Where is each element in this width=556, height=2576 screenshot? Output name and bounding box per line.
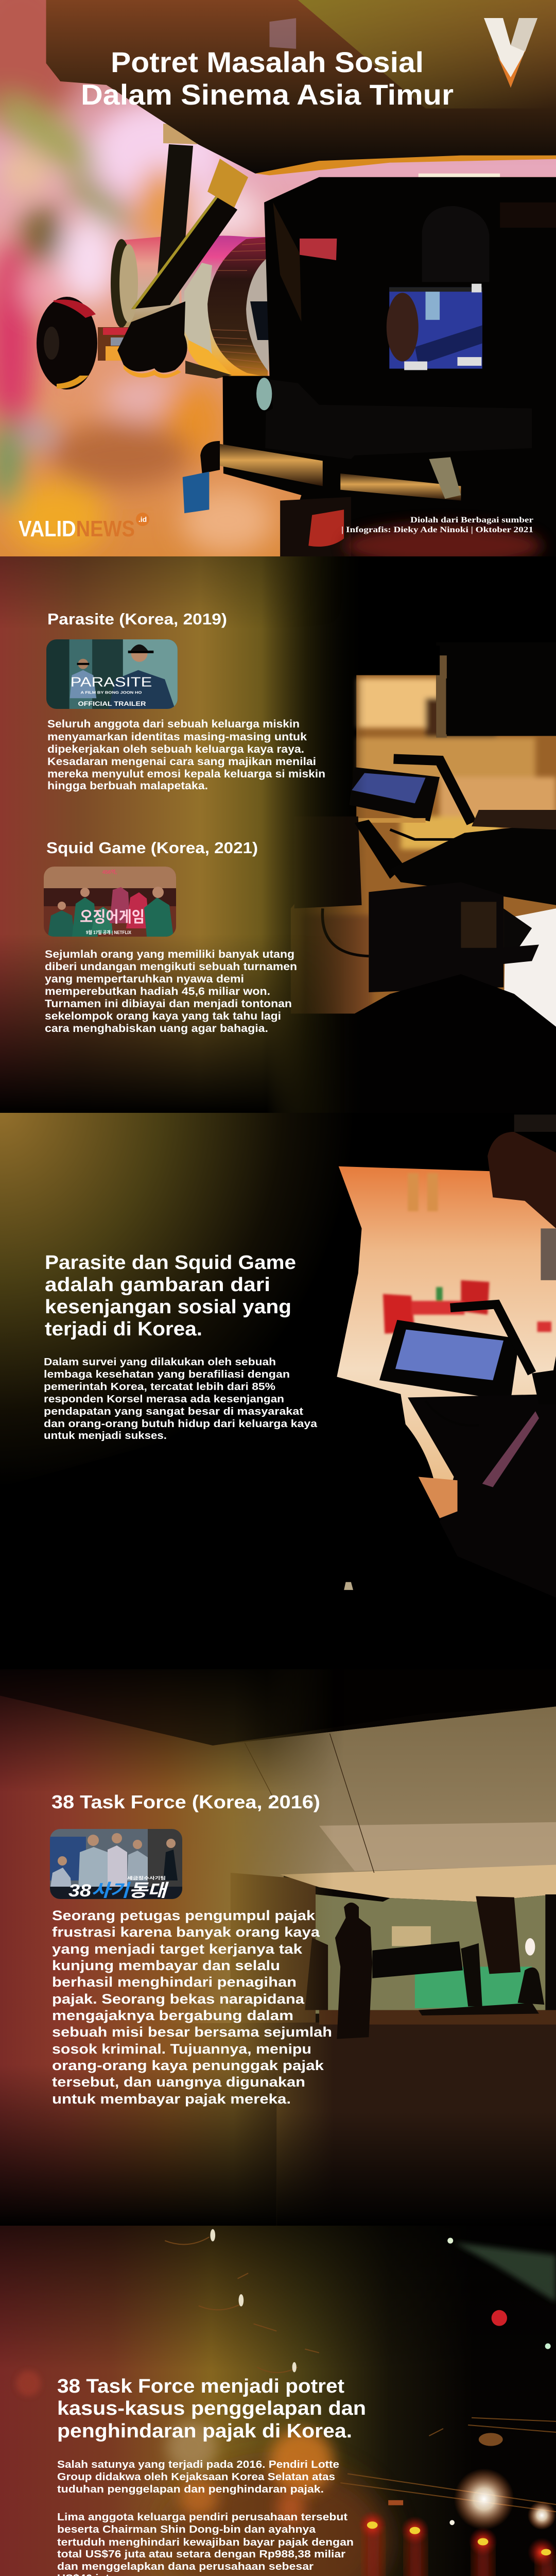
heading: social gap statement: kesenjangan sosial yang [45, 1296, 291, 1318]
thumbnail: Parasite poster: OFFICIAL TRAILER [78, 700, 146, 707]
text: survey paragraph: dan orang-orang butuh hidup dari keluarga kaya [44, 1418, 318, 1430]
panel: 38 Task Force [0, 1669, 556, 2226]
text: Squid Game synopsis: Turnamen ini dibiayai dan menjadi tontonan [45, 998, 292, 1010]
text: Lotte case figures: beserta Chairman Shin Dong-bin dan ayahnya [57, 2523, 316, 2535]
text: survey paragraph: lembaga kesehatan yang berafiliasi dengan [44, 1368, 290, 1380]
photo: film camera with lens and bokeh background [0, 0, 556, 556]
trusses [165, 2237, 556, 2512]
photo: camera rig on warm set [0, 556, 556, 1113]
rig [294, 817, 362, 908]
panel: hero cover [0, 0, 556, 556]
heading: social gap statement [45, 1252, 296, 1340]
text: survey paragraph [44, 1356, 318, 1442]
text: Squid Game synopsis: cara menghabiskan uang agar bahagia. [45, 1023, 268, 1035]
heading: tax evasion statement: penghindaran pajak di Korea. [57, 2420, 352, 2442]
text: Squid Game synopsis: yang mempertaruhkan nyawa demi [45, 973, 244, 985]
thumbnail: Parasite poster: A FILM BY BONG JOON HO [80, 691, 142, 694]
heading: Squid Game: Squid Game (Korea, 2021) [46, 839, 258, 857]
heading: tax evasion statement: kasus-kasus penggelapan dan [57, 2398, 366, 2419]
text: Squid Game synopsis: sekelompok orang kaya yang tak tahu lagi [45, 1010, 281, 1022]
heading: social gap statement: terjadi di Korea. [45, 1318, 202, 1340]
text: 38 Task Force synopsis: Seorang petugas pengumpul pajak [52, 1908, 316, 1923]
text: Lotte case intro: tuduhan penggelapan dan penghindaran pajak. [57, 2483, 324, 2495]
thumbnail: 38 Task Force poster: 38사기 동대 [68, 1881, 169, 1901]
text: Lotte case figures: total US$76 juta atau setara dengan Rp988,38 miliar [57, 2548, 345, 2560]
thumbnail: Squid Game poster: 오징어게임 [80, 909, 145, 926]
text: survey paragraph: responden Korsel merasa ada kesenjangan [44, 1393, 284, 1405]
red stage lamps [358, 2511, 556, 2576]
heading: tax evasion statement: 38 Task Force menjadi potret [57, 2376, 344, 2397]
thumbnail: Squid Game poster [44, 867, 176, 937]
text: Lotte case figures: Lima anggota keluarga pendiri perusahaan tersebut [57, 2511, 348, 2523]
thumbnail: Parasite poster [46, 639, 178, 709]
monitor [349, 767, 440, 821]
panel: Parasite and Squid Game [0, 556, 556, 1113]
thumbnail: Squid Game poster: 456억, [102, 869, 117, 875]
knob [98, 327, 131, 361]
text: Parasite synopsis: mereka menyulut emosi kepala keluarga si miskin [47, 768, 325, 780]
text: survey paragraph: pendapatan yang sangat besar di masyarakat [44, 1405, 303, 1417]
text: 38 Task Force synopsis: sebuah misi besar bersama sejumlah [52, 2024, 332, 2040]
camera body [223, 177, 556, 556]
text: 38 Task Force synopsis: frustrasi karena banyak orang kaya [52, 1924, 320, 1940]
text: Lotte case intro [57, 2459, 339, 2495]
operator silhouette [0, 1377, 461, 1669]
matte box [46, 0, 556, 174]
logo: Validnews: .id [138, 515, 147, 523]
text: 38 Task Force synopsis: mengajaknya bergabung dalam [52, 2008, 293, 2023]
text: Squid Game synopsis [45, 948, 297, 1035]
text: 38 Task Force synopsis: pajak. Seorang bekas narapidana [52, 1991, 305, 2007]
viewfinder screen [387, 284, 482, 370]
lens, knob and rods in real page units [37, 124, 270, 389]
base and rods [256, 378, 272, 410]
text: 38 Task Force synopsis: kunjung membayar dan selalu [52, 1958, 280, 1973]
text: 38 Task Force synopsis [52, 1908, 332, 2107]
thumbnail: Squid Game poster: 9월 17일 공개 | NETFLIX [86, 929, 131, 935]
text: Parasite synopsis: Seluruh anggota dari sebuah keluarga miskin [47, 718, 300, 730]
ceiling [0, 1649, 556, 1745]
thumbnail: 38 Task Force poster [50, 1829, 182, 1901]
title: Potret Masalah Sosial [111, 46, 424, 78]
heading: social gap statement: adalah gambaran dari [45, 1274, 270, 1296]
text: Lotte case intro: Salah satunya yang terjadi pada 2016. Pendiri Lotte [57, 2459, 339, 2470]
logo: Validnews: VALIDNEWS [19, 516, 135, 541]
text: Parasite synopsis: hingga berbuah malapetaka. [47, 780, 208, 792]
title [81, 46, 454, 111]
heading: social gap statement: Parasite dan Squid Game [45, 1252, 296, 1274]
standing man [335, 1903, 372, 2039]
text: Parasite synopsis: Kesadaran mengenai cara sang majikan menilai [47, 756, 316, 768]
text: Lotte case figures [57, 2511, 354, 2576]
diagonal rod [131, 195, 237, 309]
photo: silhouette of camera operator [0, 1113, 556, 1590]
text: 38 Task Force synopsis: tersebut, dan uangnya digunakan [52, 2074, 305, 2090]
hand [488, 1132, 556, 1228]
credit: | Infografis: Dieky Ade Ninoki | Oktober 2021 [341, 526, 533, 534]
text: Squid Game synopsis: Sejumlah orang yang memiliki banyak utang [45, 948, 294, 960]
thumbnail: 38 Task Force poster: 세금징수사기팀 [127, 1875, 166, 1880]
text: Lotte case intro: Group didakwa oleh Kejaksaan Korea Selatan atas [57, 2471, 335, 2483]
logo: V mark [484, 18, 537, 88]
photo: film studio with silhouette [0, 1669, 556, 2226]
panel: tax evasion in Korea [0, 2226, 556, 2576]
text: Lotte case figures: dan menggelapkan dana perusahaan sebesar [57, 2561, 314, 2572]
lens top [436, 642, 556, 736]
text: survey paragraph: Dalam survei yang dilakukan oleh sebuah [44, 1356, 276, 1368]
heading: tax evasion statement [57, 2376, 366, 2442]
credit [341, 516, 533, 534]
text: 38 Task Force synopsis: orang-orang kaya penunggak pajak [52, 2058, 324, 2073]
thumbnail: Parasite poster: PARASITE [71, 675, 152, 689]
title: Dalam Sinema Asia Timur [81, 78, 454, 111]
heading: Parasite: Parasite (Korea, 2019) [47, 610, 227, 628]
text: 38 Task Force synopsis: untuk membayar pajak mereka. [52, 2091, 291, 2107]
panel: social gap in Korea [0, 1113, 556, 1590]
text: 38 Task Force synopsis: berhasil menghindari penagihan [52, 1974, 297, 1990]
text: Squid Game synopsis: diberi undangan mengikuti sebuah turnamen [45, 961, 297, 973]
text: 38 Task Force synopsis: yang menjadi target kerjanya tak [52, 1941, 303, 1957]
text: Parasite synopsis [47, 718, 325, 792]
lens base [185, 361, 232, 379]
monitor [379, 1320, 519, 1401]
text: survey paragraph: pemerintah Korea, tercatat lebih dari 85% [44, 1381, 275, 1393]
vertical rod [156, 144, 193, 291]
text: Parasite synopsis: dipekerjakan oleh sebuah keluarga kaya raya. [47, 743, 304, 755]
photo: stage lights [0, 2226, 556, 2576]
text: Squid Game synopsis: memperebutkan hadiah 45,6 miliar won. [45, 986, 270, 997]
text: 38 Task Force synopsis: sosok kriminal. Tujuannya, menipu [52, 2041, 311, 2057]
credit: Diolah dari Berbagai sumber [410, 516, 533, 524]
text: survey paragraph: untuk menjadi sukses. [44, 1430, 167, 1442]
text: Lotte case figures: tertuduh menghindari kewajiban bayar pajak dengan [57, 2536, 354, 2548]
heading: 38 Task Force: 38 Task Force (Korea, 2016) [51, 1791, 320, 1812]
text: Parasite synopsis: menyamarkan identitas masing-masing untuk [47, 731, 307, 743]
